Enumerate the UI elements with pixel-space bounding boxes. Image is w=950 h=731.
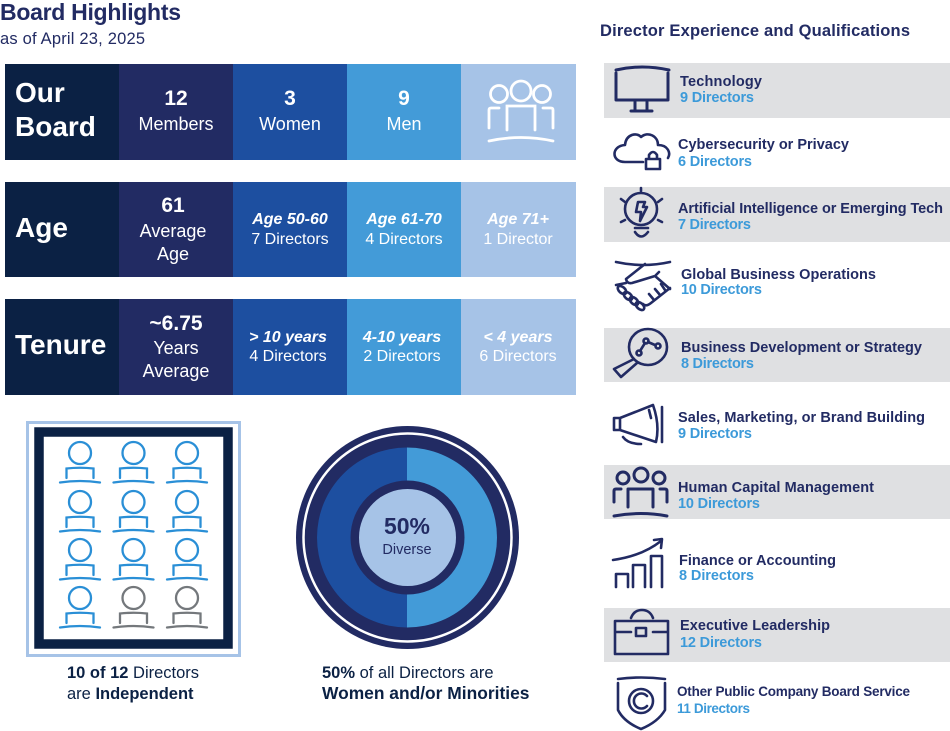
skill: board service (618, 678, 910, 729)
panel: age: 7 Directors (251, 231, 329, 248)
donut chart: 50% (384, 513, 430, 539)
panel: tenure: > 10 years (249, 329, 327, 346)
panel: age: Age (157, 244, 189, 264)
skill: cybersecurity: Cybersecurity or Privacy (678, 137, 849, 153)
caption: independence: 10 of 12 Directors (67, 664, 199, 682)
panel: tenure: 4 Directors (249, 348, 327, 365)
skill: board service: Other Public Company Board Service (677, 684, 910, 699)
panel: age: Age (15, 212, 68, 243)
panel: our board: 9 (398, 87, 410, 110)
skill: human capital (604, 465, 950, 519)
panel: our board: Women (259, 114, 321, 134)
skill: technology (604, 63, 950, 118)
panel: age: Average (140, 221, 206, 241)
skill: business development (604, 328, 950, 382)
panel: age: 1 Director (483, 231, 553, 248)
icon: briefcase (615, 610, 668, 654)
icon: monitor (616, 67, 669, 111)
skill: finance: 8 Directors (679, 568, 754, 584)
icons: non-independent directors (114, 587, 207, 628)
title: as of April 23, 2025 (0, 30, 145, 48)
panel: our board: 3 (284, 87, 296, 110)
skill: technology: Technology (680, 74, 762, 90)
skill: board service: 11 Directors (677, 701, 750, 716)
caption: diversity: Women and/or Minorities (322, 683, 529, 703)
panel: age: 61 (161, 194, 185, 217)
skill: technology: 9 Directors (680, 90, 754, 106)
icon: shield copyright (618, 678, 665, 729)
skill: cybersecurity: 6 Directors (678, 154, 752, 170)
panel: our board: Our (15, 77, 65, 108)
panel: tenure: Average (143, 361, 209, 381)
skill: business development: Business Development or Strategy (681, 340, 922, 356)
icon: growth chart (613, 539, 662, 587)
panel: our board: Men (386, 114, 422, 134)
panel: tenure: Years (153, 338, 199, 358)
caption: independence: are Independent (67, 685, 194, 703)
panel: age: Age 71+ (486, 211, 549, 228)
skill: sales (614, 405, 925, 444)
icon: megaphone (614, 405, 662, 444)
skill: artificial intelligence (604, 187, 950, 242)
skill: sales: Sales, Marketing, or Brand Building (678, 410, 925, 426)
panel: our board: Members (138, 114, 214, 134)
panel: tenure: 6 Directors (479, 348, 557, 365)
caption: diversity: 50% of all Directors are (322, 664, 494, 682)
panel: age: Age 50-60 (251, 211, 328, 228)
panel: age: Age 61-70 (365, 211, 442, 228)
skill: human capital: Human Capital Management (678, 480, 874, 496)
heading: director experience: Director Experience and Qualifications (600, 22, 910, 40)
panel: our board: 12 (164, 87, 188, 110)
skill: global business: 10 Directors (681, 282, 762, 298)
panel: tenure: 2 Directors (363, 348, 441, 365)
skill: executive: 12 Directors (680, 635, 762, 651)
skill: cybersecurity (614, 134, 849, 170)
skill: sales: 9 Directors (678, 426, 752, 442)
panel: our board (5, 64, 576, 160)
donut chart: Diverse (382, 542, 432, 558)
skill: executive: Executive Leadership (680, 618, 830, 634)
icon: cloud lock (614, 134, 669, 169)
skill: human capital: 10 Directors (678, 496, 760, 512)
skill: artificial intelligence: 7 Directors (678, 217, 751, 233)
panel: independence frame (28, 422, 240, 656)
caption: diversity (322, 664, 529, 703)
caption: independence (67, 664, 199, 703)
panel: tenure (5, 299, 576, 395)
panel: tenure: < 4 years (484, 329, 553, 346)
icon: people (614, 468, 667, 516)
panel: age: 4 Directors (365, 231, 443, 248)
panel: tenure: ~6.75 (149, 312, 203, 335)
icons: independent directors (60, 442, 207, 628)
panel: tenure: Tenure (15, 329, 106, 360)
panel: tenure: 4-10 years (362, 329, 441, 346)
panel: age (5, 182, 576, 277)
skill: finance: Finance or Accounting (679, 553, 836, 569)
panel: our board: Board (15, 111, 96, 142)
icon: handshake (616, 262, 670, 312)
icon: people (489, 81, 553, 141)
donut chart (296, 426, 519, 649)
title (0, 0, 181, 48)
icon: lightbulb (621, 188, 662, 236)
skill: global business (616, 262, 876, 312)
skill: finance (613, 539, 836, 587)
skill: business development: 8 Directors (681, 356, 754, 372)
skill: executive (604, 608, 950, 662)
skill: artificial intelligence: Artificial Intelligence or Emerging Tech (678, 201, 943, 217)
skill: global business: Global Business Operations (681, 267, 876, 283)
icon: magnifier (614, 329, 667, 377)
